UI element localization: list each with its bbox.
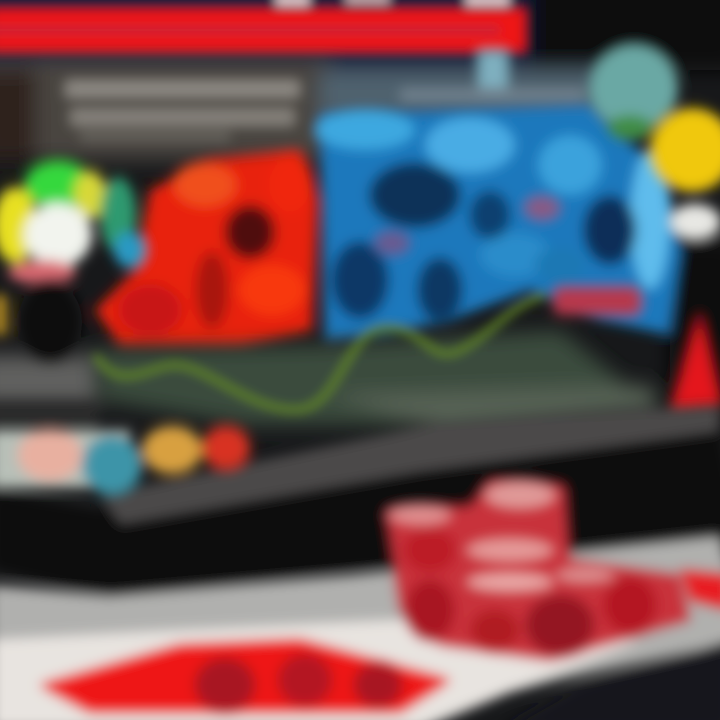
panel: red map: [95, 150, 318, 345]
icon: teal globe: [590, 44, 678, 140]
line chart: [95, 295, 545, 410]
platform: [0, 400, 720, 600]
icon: yellow bulb: [650, 108, 720, 240]
top banner: [0, 0, 525, 95]
icon: black figure: [0, 282, 82, 362]
red cubes: [385, 480, 720, 660]
heading text blur: [65, 80, 585, 142]
color legend bar: [0, 426, 250, 495]
chart base: [95, 330, 660, 430]
background wall: [0, 0, 720, 420]
red pool: [40, 640, 450, 712]
floor: [0, 535, 720, 720]
icon: red cone: [670, 310, 720, 410]
panel: blue map: [315, 105, 682, 340]
icon: rainbow circle: [0, 161, 146, 284]
callout: [553, 287, 641, 315]
